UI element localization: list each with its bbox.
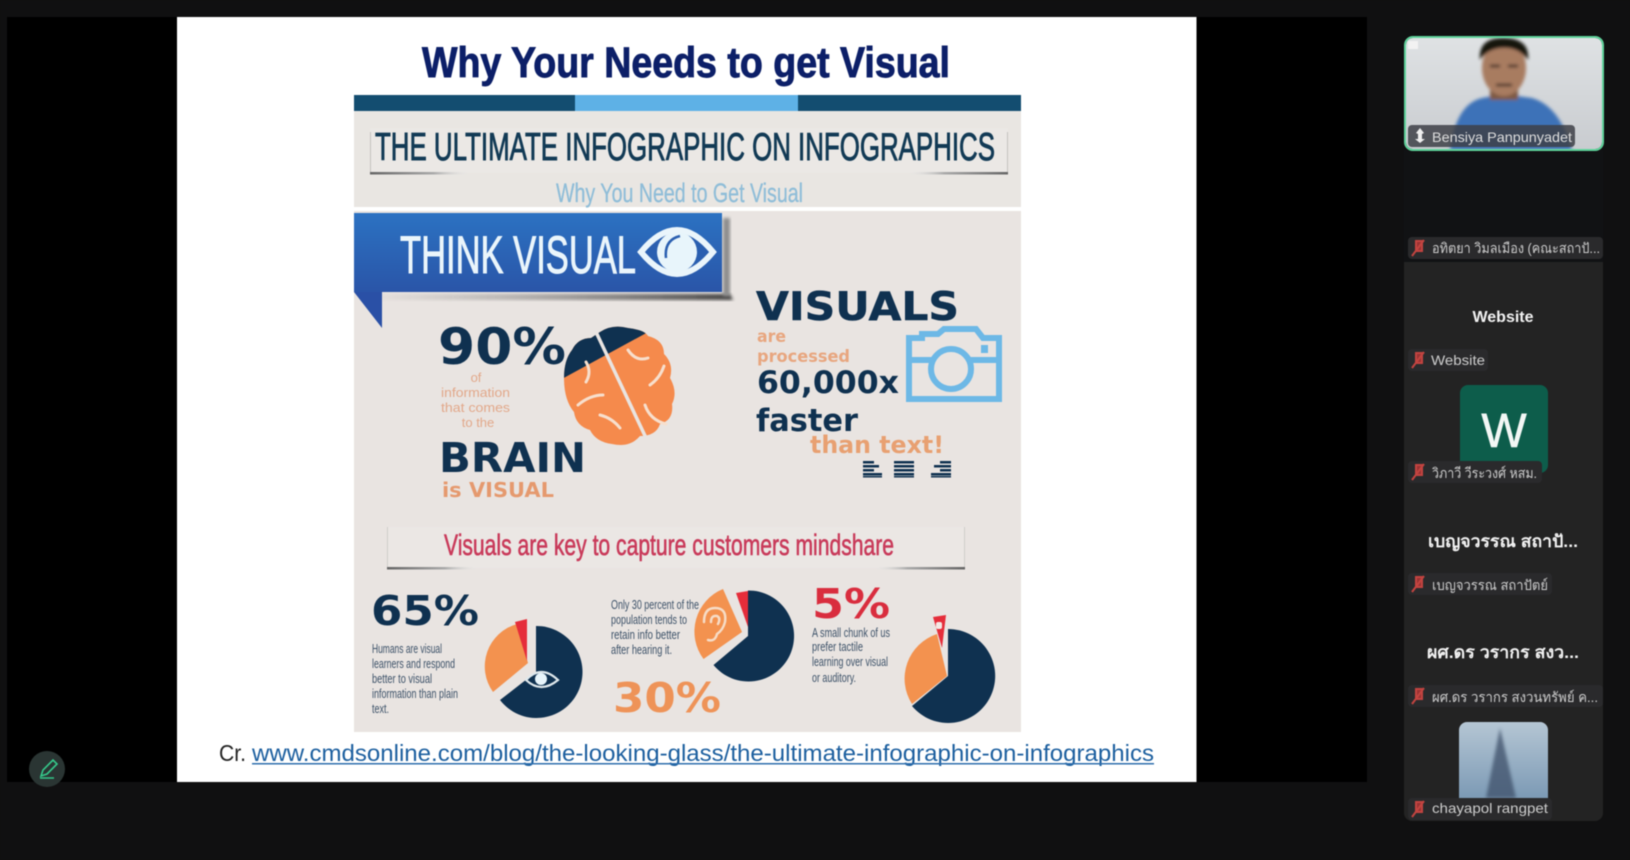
name label: Bensiya bbox=[1408, 125, 1575, 147]
name label: Website bbox=[1408, 349, 1488, 371]
source link: www.cmdsonline.com/blog/the-looking-glass/the-ultimate-infographic-on-infographics bbox=[251, 740, 1154, 766]
brain word: BRAIN bbox=[439, 434, 586, 482]
supporting text: information bbox=[441, 385, 510, 400]
65% description: text. bbox=[372, 701, 389, 716]
credit prefix: Cr. bbox=[219, 740, 246, 766]
65% description bbox=[372, 641, 458, 716]
5% description bbox=[812, 625, 890, 685]
pie chart: 5 percent bbox=[905, 615, 995, 723]
sidebar dark tile bbox=[1404, 150, 1603, 262]
icon: hand bbox=[936, 622, 942, 629]
pie chart: 65 percent bbox=[485, 619, 582, 718]
slide panel bbox=[177, 17, 1196, 782]
infographic panel bbox=[354, 95, 1021, 732]
think visual text: THINK VISUAL bbox=[400, 226, 636, 285]
source credit bbox=[219, 740, 1154, 766]
presenter figure bbox=[1450, 38, 1572, 150]
name label: Website: Website bbox=[1431, 352, 1485, 368]
30% description: retain info better bbox=[611, 627, 680, 642]
supporting text: to the bbox=[462, 415, 494, 430]
name label: Bensiya: Bensiya Panpunyadet bbox=[1432, 129, 1572, 145]
statistic: 65 percent visual learners bbox=[371, 587, 582, 718]
icon: text alignment bbox=[863, 461, 951, 478]
icon: camera bbox=[909, 329, 999, 399]
name label: participant 2 bbox=[1408, 237, 1603, 259]
header background bbox=[354, 111, 1021, 207]
infographic heading: THE ULTIMATE INFOGRAPHIC ON INFOGRAPHICS bbox=[375, 126, 995, 169]
statistic: visuals processed faster bbox=[756, 285, 999, 478]
5% figure: 5% bbox=[812, 580, 890, 628]
than text: than text! bbox=[810, 431, 944, 459]
5% description: A small chunk of us bbox=[812, 625, 890, 640]
icon: annotation pencil button bbox=[29, 751, 65, 787]
participant name: Website: Website bbox=[1472, 309, 1534, 326]
shared screen black area bbox=[7, 17, 1367, 782]
30% description bbox=[611, 597, 699, 657]
name label: participant 2: อทิตยา วิมลเมือง (คณะสถาปั... bbox=[1432, 240, 1600, 256]
name label: participant 4: วิภาวี วีระวงศ์ หสม. bbox=[1432, 465, 1537, 481]
icon: eye bbox=[641, 230, 713, 274]
30% description: after hearing it. bbox=[611, 642, 672, 657]
think visual ribbon bbox=[354, 213, 733, 328]
slide title: Why Your Needs to get Visual bbox=[422, 39, 950, 87]
statistic: 30 percent auditory bbox=[611, 589, 794, 722]
icon: eye on pie bbox=[526, 672, 558, 687]
name label: chayapol bbox=[1408, 798, 1552, 820]
mindshare ribbon bbox=[387, 527, 965, 570]
30% description: Only 30 percent of the bbox=[611, 597, 699, 612]
mindshare text: Visuals are key to capture customers mindshare bbox=[444, 529, 894, 562]
participant sidebar bbox=[1404, 37, 1603, 821]
visuals word: VISUALS bbox=[756, 285, 959, 330]
supporting text: that comes bbox=[441, 400, 511, 415]
name label: Benjawan: เบญจวรรณ สถาปัตย์ bbox=[1432, 577, 1548, 593]
name label: chayapol: chayapol rangpet bbox=[1432, 800, 1548, 816]
30% figure: 30% bbox=[613, 674, 721, 722]
60,000x figure: 60,000x bbox=[757, 365, 899, 401]
infographic subheading: Why You Need to Get Visual bbox=[556, 178, 803, 208]
avatar: W tile: W bbox=[1481, 405, 1527, 458]
65% description: information than plain bbox=[372, 686, 458, 701]
name label: Benjawan bbox=[1408, 573, 1552, 595]
sidebar tile background bbox=[1404, 262, 1603, 821]
icon: brain bbox=[564, 327, 675, 445]
5% description: learning over visual bbox=[812, 654, 888, 669]
90% figure: 90% bbox=[438, 318, 566, 376]
name label: Warakorn bbox=[1408, 685, 1603, 707]
lower infographic background bbox=[354, 211, 1021, 732]
header ribbon bbox=[370, 126, 1008, 174]
is visual text: is VISUAL bbox=[442, 478, 554, 502]
name label: participant 4 bbox=[1408, 461, 1542, 483]
pie chart: 30 percent bbox=[694, 589, 794, 681]
supporting text bbox=[441, 370, 511, 430]
are processed text: processed bbox=[757, 347, 850, 367]
participant name: Benjawan: เบญจวรรณ สถาปั... bbox=[1428, 532, 1578, 552]
supporting text: of bbox=[471, 370, 482, 385]
5% description: or auditory. bbox=[812, 670, 856, 685]
faster word: faster bbox=[756, 403, 859, 439]
65% figure: 65% bbox=[371, 587, 479, 635]
icon: ear bbox=[704, 608, 725, 640]
participant name: Warakorn: ผศ.ดร วรากร สงว... bbox=[1427, 643, 1579, 662]
65% description: better to visual bbox=[372, 671, 432, 686]
avatar: W tile bbox=[1460, 385, 1548, 473]
are processed text: are bbox=[757, 327, 786, 347]
avatar: tower photo bbox=[1459, 722, 1548, 798]
participant video: Bensiya bbox=[1405, 37, 1603, 150]
statistic: 5 percent tactile bbox=[812, 580, 995, 723]
65% description: Humans are visual bbox=[372, 641, 442, 656]
65% description: learners and respond bbox=[372, 656, 455, 671]
top colour bar bbox=[354, 95, 1021, 111]
statistic: 90 percent brain bbox=[438, 318, 675, 502]
30% description: population tends to bbox=[611, 612, 687, 627]
are processed text bbox=[757, 327, 850, 367]
5% description: prefer tactile bbox=[812, 639, 863, 654]
name label: Warakorn: ผศ.ดร วรากร สงวนทรัพย์ ค... bbox=[1432, 689, 1598, 705]
